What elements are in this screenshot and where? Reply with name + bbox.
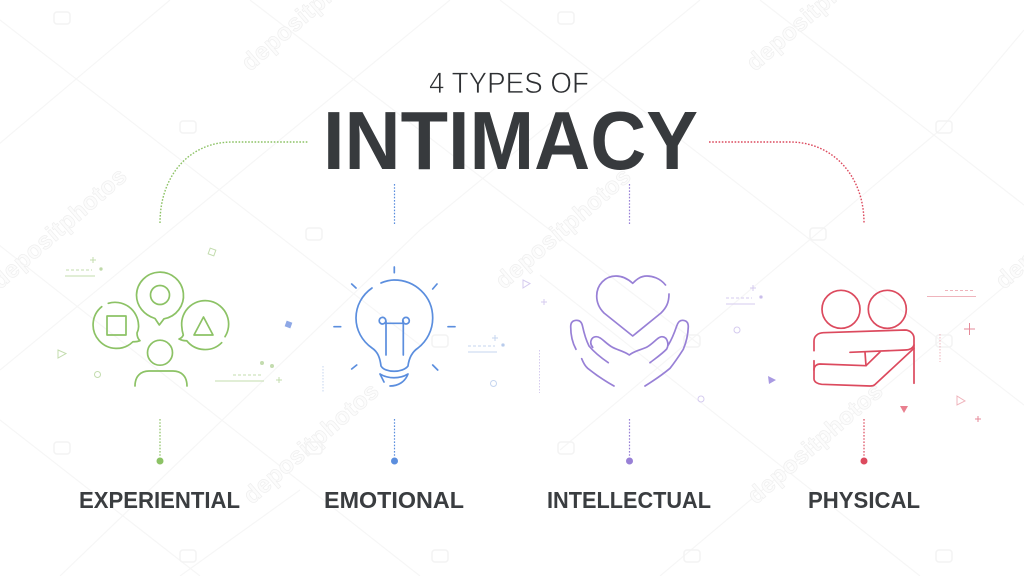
watermark text: depositphotos [742, 378, 888, 510]
decorations: intellectual [523, 280, 762, 402]
decoration: red triangle [900, 406, 908, 413]
subtitle: 4 TYPES OF [429, 67, 589, 100]
title: INTIMACY [323, 94, 698, 187]
label: intellectual: INTELLECTUAL [547, 487, 711, 513]
icon: light bulb [334, 267, 455, 386]
icon: experiential people and speech bubbles [93, 272, 229, 386]
stem and dot: emotional [391, 419, 398, 464]
label: experiential: EXPERIENTIAL [79, 487, 240, 513]
connector: physical [709, 142, 864, 223]
stem and dot: intellectual [626, 419, 633, 464]
icon: two people hugging [814, 290, 914, 386]
decorations: physical [927, 290, 981, 422]
decoration: blue diamond [285, 321, 292, 328]
label: emotional: EMOTIONAL [324, 487, 464, 513]
icon: heart in hands [571, 276, 688, 386]
watermark text: depositphotos [490, 163, 636, 295]
stem and dot: experiential [156, 419, 164, 464]
connector: intellectual [628, 184, 630, 224]
watermark text: depositphotos [238, 378, 384, 510]
connector: experiential [160, 142, 308, 223]
decorations: experiential [58, 248, 282, 383]
decoration: purple triangle [768, 376, 776, 384]
decorations: emotional [323, 335, 504, 392]
connector: emotional [394, 184, 396, 224]
stem and dot: physical [860, 419, 868, 464]
label: physical: PHYSICAL [808, 487, 920, 513]
